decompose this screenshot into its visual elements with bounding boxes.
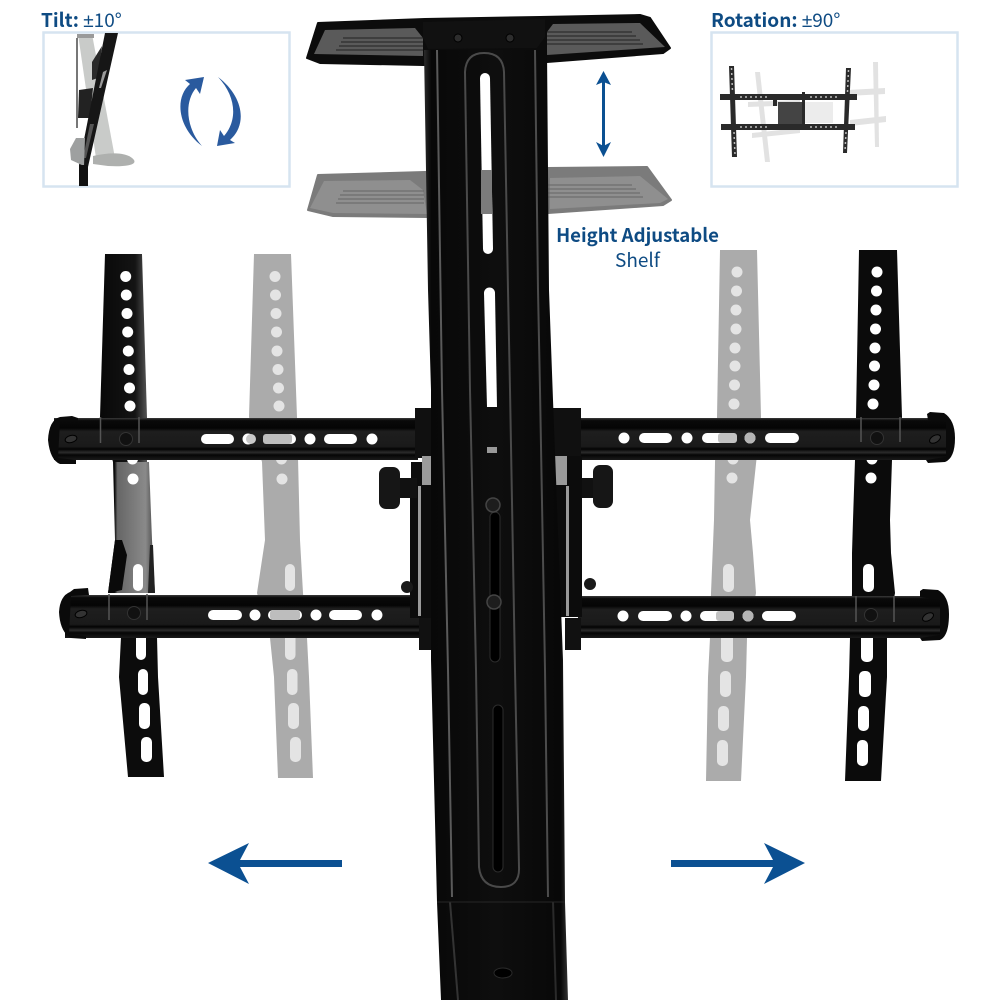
panel: rotation	[711, 6, 958, 186]
lower left rail	[59, 588, 422, 639]
arrow: left	[208, 843, 342, 884]
column screws	[486, 498, 501, 609]
middle slot opening	[484, 288, 497, 453]
label: height adjustable shelf	[556, 221, 719, 273]
ghost VESA bracket left	[249, 254, 313, 778]
lower slots	[490, 512, 503, 872]
top shelf	[307, 15, 670, 65]
vertical height arrow	[596, 71, 611, 157]
base hole	[494, 968, 512, 978]
left tilt mechanism and knob	[379, 408, 435, 650]
panel: tilt	[41, 6, 290, 186]
upper slot opening	[480, 73, 493, 254]
upper left rail	[48, 416, 418, 464]
ghost VESA bracket right	[706, 250, 761, 781]
lower right rail	[578, 589, 949, 641]
label: height adjustable shelf: Height Adjustable	[556, 221, 719, 248]
icon: tilt arrows	[180, 77, 241, 146]
black VESA bracket right	[845, 250, 902, 781]
black VESA bracket left	[100, 254, 164, 777]
arrow: right	[671, 843, 805, 884]
rotation mount illustration	[720, 62, 886, 162]
heading: rotation: Rotation: ±90°	[711, 6, 840, 33]
shelf bracket	[423, 19, 545, 49]
panel frame: rotation	[712, 32, 958, 186]
label: height adjustable shelf: Shelf	[615, 246, 661, 273]
column highlights	[437, 50, 556, 1000]
tilted monitor illustration	[70, 33, 134, 186]
height adjustable shelf ghost position	[308, 167, 671, 217]
upper right rail	[578, 412, 955, 463]
right tilt mechanism and knob	[553, 408, 613, 650]
heading: tilt: Tilt: ±10°	[41, 6, 122, 33]
bracket screws	[454, 34, 514, 42]
panel frame: tilt	[44, 32, 290, 186]
central column	[424, 50, 568, 1000]
